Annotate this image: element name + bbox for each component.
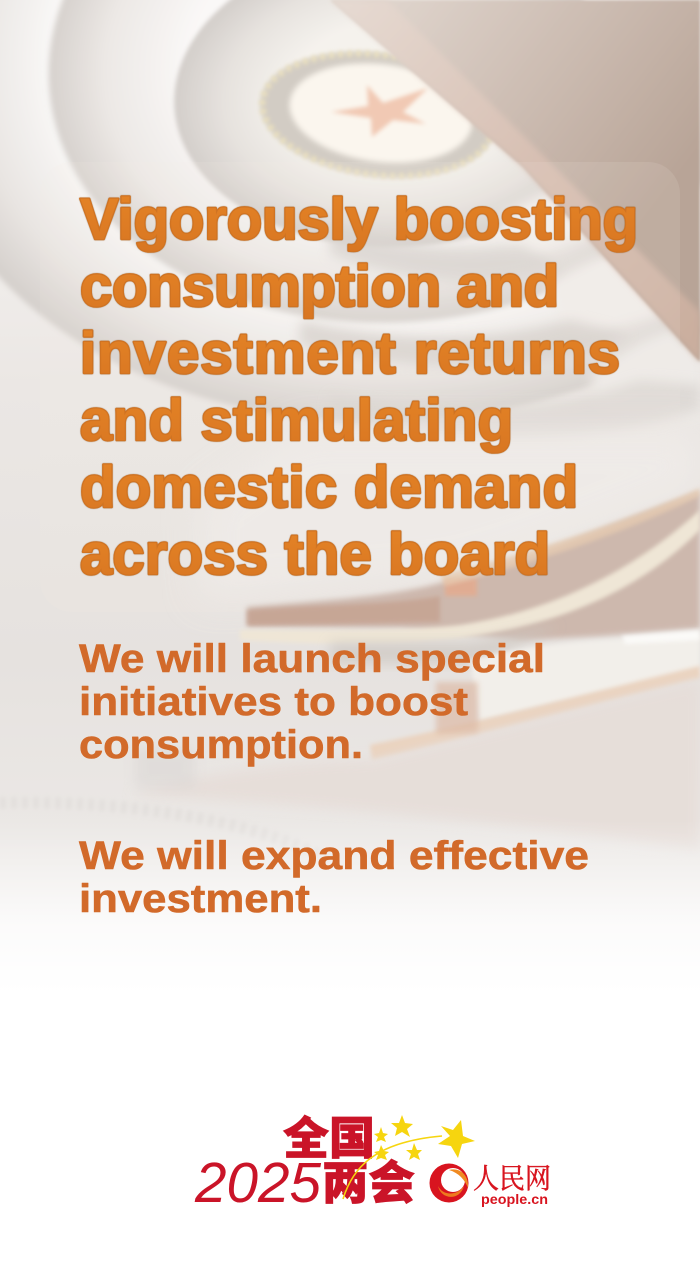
seating tier: orange stripe [370,666,700,760]
ceiling [330,0,700,362]
grey tier shadows [330,225,560,281]
logo: 2025 Two Sessions [194,1102,551,1215]
text block: consumption initiatives: consumption. [79,723,363,767]
title: Vigorously boosting [80,187,638,252]
text block: effective investment: investment. [79,877,322,921]
logo text: 两会: 两会 [322,1147,415,1213]
title: consumption and [80,254,559,319]
text block: effective investment [79,834,589,921]
seating tier: brown band [247,492,700,640]
title: domestic demand [80,455,578,520]
translucent text panel [40,162,680,612]
title: and stimulating [80,388,513,453]
text block: consumption initiatives: initiatives to boost [79,680,468,724]
icon: People's Daily Online swirl [430,1164,468,1202]
title: investment returns [80,321,620,386]
text block: effective investment: We will expand effective [79,834,589,878]
outer pale tiers [0,0,700,478]
logo text: 全国: 全国 [283,1102,375,1167]
emblem star [331,85,428,137]
text block: consumption initiatives: We will launch special [79,637,545,681]
light floor below tiers [200,430,700,600]
logo text: people.cn: people.cn [481,1192,548,1207]
seating tier: lower rows [130,680,700,850]
icon: golden stars and arc [343,1115,475,1199]
text block: consumption initiatives [79,637,545,767]
emblem [253,39,502,191]
bright tier crests on the right [500,186,600,262]
title: across the board [80,522,550,587]
logo text: 人民网: 人民网 [473,1157,551,1197]
title [80,187,638,587]
seating tier: cream band [240,510,700,644]
logo text: 2025: 2025 [194,1151,321,1215]
